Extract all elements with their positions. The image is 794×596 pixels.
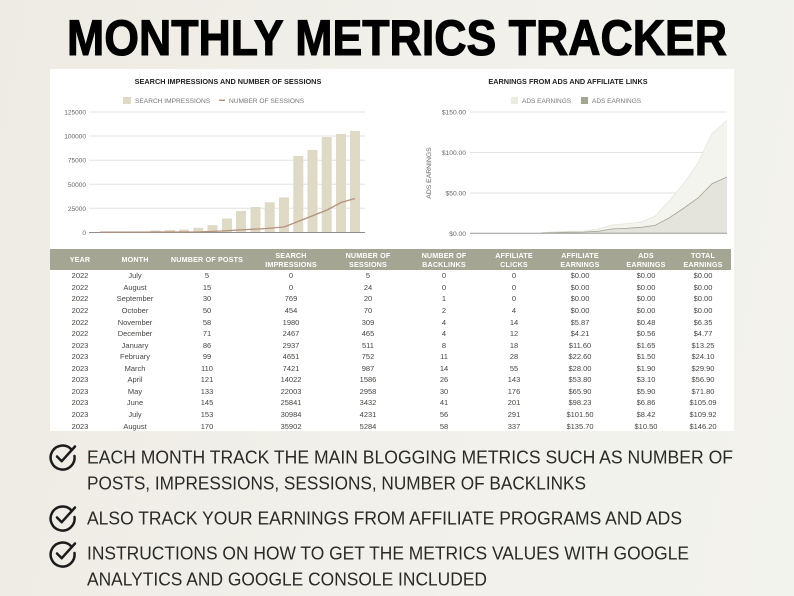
table rows: 4651 — [283, 352, 299, 361]
title: MONTHLY METRICS TRACKER — [67, 10, 727, 66]
table rows: 70 — [364, 306, 372, 315]
table rows: 170 — [201, 422, 213, 430]
y axis labels — [64, 110, 86, 237]
table rows: 8 — [442, 341, 446, 350]
table rows: 71 — [203, 329, 211, 338]
table rows: $135.70 — [566, 422, 594, 430]
table rows: 14 — [440, 364, 448, 373]
table rows: September — [117, 294, 153, 303]
table rows: October — [122, 306, 148, 315]
table header: CLICKS — [500, 260, 528, 268]
table rows: $0.00 — [637, 271, 655, 280]
table rows: February — [120, 352, 150, 361]
legend: ADS EARNINGS — [522, 98, 572, 105]
bullet text 1: POSTS, IMPRESSIONS, SESSIONS, NUMBER OF BACKLINKS — [87, 472, 586, 494]
table rows: $0.00 — [571, 283, 589, 292]
table header: SESSIONS — [349, 260, 387, 268]
table rows: April — [127, 375, 142, 384]
data table — [50, 249, 731, 430]
table rows: 7421 — [283, 364, 299, 373]
table rows: $0.48 — [637, 318, 655, 327]
icon: check 3 — [51, 543, 75, 567]
table rows: 4 — [442, 329, 446, 338]
table rows: 4 — [442, 318, 446, 327]
table rows: 35902 — [281, 422, 301, 430]
y axis labels: 25000 — [68, 206, 86, 213]
table rows: 201 — [508, 398, 520, 407]
y axis title: ADS EARNINGS — [426, 147, 433, 199]
table rows: $5.87 — [571, 318, 589, 327]
area: affiliate earnings — [541, 120, 727, 233]
baseline — [470, 232, 727, 234]
table rows: $56.90 — [692, 375, 714, 384]
table rows: 22003 — [281, 387, 301, 396]
table rows: 2022 — [72, 306, 88, 315]
table rows: 337 — [508, 422, 520, 430]
table rows: 11 — [440, 352, 448, 361]
table rows: $105.09 — [689, 398, 717, 407]
table rows: $0.00 — [637, 306, 655, 315]
table rows: $0.00 — [637, 283, 655, 292]
table rows: 0 — [442, 271, 446, 280]
table rows: 18 — [510, 341, 518, 350]
chart: earnings from ads and affiliate links — [426, 77, 727, 238]
icon: check 1 — [51, 446, 75, 470]
table rows: 121 — [201, 375, 213, 384]
table rows: 454 — [285, 306, 297, 315]
table rows: 56 — [440, 410, 448, 419]
table rows: $0.56 — [637, 329, 655, 338]
table rows: 2023 — [72, 352, 88, 361]
table rows: 143 — [508, 375, 520, 384]
table rows: $101.50 — [566, 410, 594, 419]
table rows: $6.86 — [637, 398, 655, 407]
bullet text 1 — [87, 446, 733, 494]
table rows: 2022 — [72, 329, 88, 338]
table rows: 4231 — [360, 410, 376, 419]
table header: EARNINGS — [560, 260, 600, 268]
table rows: 176 — [508, 387, 520, 396]
table rows: 511 — [362, 341, 374, 350]
y axis labels: $0.00 — [449, 231, 466, 238]
table rows: 2023 — [72, 410, 88, 419]
table rows: 0 — [512, 294, 516, 303]
table rows: $5.90 — [637, 387, 655, 396]
table rows: 2937 — [283, 341, 299, 350]
table rows: 2022 — [72, 271, 88, 280]
table rows: $109.92 — [689, 410, 717, 419]
table header: ADS — [638, 250, 654, 260]
table header: SEARCH — [275, 250, 307, 260]
chart title: EARNINGS FROM ADS AND AFFILIATE LINKS — [488, 77, 648, 86]
table rows: December — [118, 329, 152, 338]
y axis labels: $150.00 — [442, 110, 466, 116]
table rows: $11.60 — [569, 341, 591, 350]
table header: AFFILIATE — [561, 250, 599, 260]
table header: YEAR — [70, 255, 90, 264]
table rows: 2022 — [72, 294, 88, 303]
y axis labels: $100.00 — [442, 150, 466, 157]
table rows: $1.90 — [637, 364, 655, 373]
table header: IMPRESSIONS — [265, 260, 317, 268]
table rows: May — [128, 387, 142, 396]
table header: NUMBER OF — [346, 250, 390, 260]
table rows: 0 — [512, 271, 516, 280]
legend: ADS EARNINGS — [592, 98, 642, 105]
table rows: 55 — [510, 364, 518, 373]
table rows: 2 — [442, 306, 446, 315]
table rows: 0 — [289, 271, 293, 280]
table rows: $0.00 — [694, 306, 712, 315]
table rows: 5 — [205, 271, 209, 280]
table rows: 2022 — [72, 318, 88, 327]
table rows: July — [128, 271, 142, 280]
table rows: March — [125, 364, 145, 373]
y axis labels: 50000 — [68, 182, 86, 189]
table rows — [72, 271, 717, 430]
table rows: $10.50 — [635, 422, 657, 430]
table header: TOTAL — [691, 250, 715, 260]
baseline — [89, 232, 365, 234]
legend: SEARCH IMPRESSIONS — [135, 98, 211, 105]
table rows: $24.10 — [692, 352, 714, 361]
table rows: $22.60 — [569, 352, 591, 361]
y axis labels: $50.00 — [446, 190, 466, 198]
bullet text 3 — [87, 542, 689, 590]
table rows: 2023 — [72, 375, 88, 384]
table rows: August — [123, 283, 147, 292]
area: ads earnings — [541, 177, 727, 233]
table rows: 1980 — [283, 318, 299, 327]
legend — [123, 97, 305, 105]
table rows: 24 — [364, 283, 372, 292]
table rows: 987 — [362, 364, 374, 373]
table rows: $0.00 — [571, 306, 589, 315]
table rows: $1.65 — [637, 341, 655, 350]
table rows: 0 — [289, 283, 293, 292]
table rows: $29.90 — [692, 364, 714, 373]
table rows: June — [127, 398, 143, 407]
table rows: 30 — [203, 294, 211, 303]
table rows: 2023 — [72, 341, 88, 350]
table rows: $3.10 — [637, 375, 655, 384]
table rows: 58 — [440, 422, 448, 430]
table rows: 769 — [285, 294, 297, 303]
legend — [511, 97, 642, 105]
table rows: $28.00 — [569, 364, 591, 373]
table rows: 30984 — [281, 410, 301, 419]
table rows: 133 — [201, 387, 213, 396]
bullet text 3: INSTRUCTIONS ON HOW TO GET THE METRICS VALUES WITH GOOGLE — [87, 542, 689, 564]
table header: EARNINGS — [626, 260, 666, 268]
table rows: 2023 — [72, 422, 88, 430]
line: number of sessions — [100, 198, 355, 232]
y axis labels — [442, 110, 466, 238]
table rows: 153 — [201, 410, 213, 419]
table header: NUMBER OF POSTS — [171, 255, 243, 264]
table rows: 25841 — [281, 398, 301, 407]
table rows: $146.20 — [689, 422, 717, 430]
y axis labels: 0 — [82, 230, 86, 237]
table rows: 0 — [442, 283, 446, 292]
table rows: 1586 — [360, 375, 376, 384]
table rows: 41 — [440, 398, 448, 407]
table rows: 2958 — [360, 387, 376, 396]
table header — [50, 249, 731, 270]
legend: NUMBER OF SESSIONS — [229, 98, 305, 105]
table rows: 14 — [510, 318, 518, 327]
table rows: $13.25 — [692, 341, 714, 350]
gridlines — [470, 112, 727, 193]
table rows: 58 — [203, 318, 211, 327]
table rows: 2467 — [283, 329, 299, 338]
bullet text 2: ALSO TRACK YOUR EARNINGS FROM AFFILIATE PROGRAMS AND ADS — [87, 508, 682, 528]
table rows: 110 — [201, 364, 213, 373]
table rows: 28 — [510, 352, 518, 361]
table rows: $0.00 — [694, 283, 712, 292]
table rows: $98.23 — [569, 398, 591, 407]
table rows: $4.21 — [571, 329, 589, 338]
y axis labels: 100000 — [64, 134, 86, 140]
table rows: July — [128, 410, 142, 419]
panel: white dashboard sheet — [50, 69, 734, 431]
table rows: 309 — [362, 318, 374, 327]
table header: AFFILIATE — [495, 250, 533, 260]
table rows: 26 — [440, 375, 448, 384]
area outline: affiliate earnings — [541, 120, 727, 233]
table rows: 20 — [364, 294, 372, 303]
chart title: SEARCH IMPRESSIONS AND NUMBER OF SESSIONS — [135, 77, 321, 86]
table rows: 2023 — [72, 398, 88, 407]
table rows: 3432 — [360, 398, 376, 407]
gridlines — [89, 112, 365, 208]
table rows: 4 — [512, 306, 516, 315]
table rows: 0 — [512, 283, 516, 292]
table rows: 2022 — [72, 283, 88, 292]
table rows: 12 — [510, 329, 518, 338]
table rows: 50 — [203, 306, 211, 315]
area outline: ads earnings — [541, 177, 727, 233]
table rows: $0.00 — [571, 294, 589, 303]
bullet text 3: ANALYTICS AND GOOGLE CONSOLE INCLUDED — [87, 568, 487, 590]
table header: BACKLINKS — [422, 260, 466, 268]
table rows: 99 — [203, 352, 211, 361]
table rows: 30 — [440, 387, 448, 396]
bullet text 1: EACH MONTH TRACK THE MAIN BLOGGING METRICS SUCH AS NUMBER OF — [87, 446, 733, 468]
table rows: January — [122, 341, 148, 350]
table rows: $1.50 — [637, 352, 655, 361]
table rows: 1 — [442, 294, 446, 303]
table rows: $8.42 — [637, 410, 655, 419]
table rows: 2023 — [72, 364, 88, 373]
table rows: $71.80 — [692, 387, 714, 396]
table rows: $0.00 — [694, 294, 712, 303]
table rows: November — [118, 318, 152, 327]
table rows: 14022 — [281, 375, 301, 384]
table rows: $0.00 — [571, 271, 589, 280]
table rows: $4.77 — [694, 329, 712, 338]
chart: search impressions and sessions — [64, 77, 365, 237]
table rows: 86 — [203, 341, 211, 350]
table rows: 15 — [203, 283, 211, 292]
table rows: August — [123, 422, 147, 430]
table rows: $0.00 — [694, 271, 712, 280]
y axis labels: 75000 — [68, 158, 86, 165]
table rows: 2023 — [72, 387, 88, 396]
table rows: 465 — [362, 329, 374, 338]
table rows: 752 — [362, 352, 374, 361]
table rows: 145 — [201, 398, 213, 407]
table rows: $6.35 — [694, 318, 712, 327]
table header: MONTH — [121, 255, 149, 264]
table rows: $65.90 — [569, 387, 591, 396]
table rows: 5 — [366, 271, 370, 280]
table header: EARNINGS — [683, 260, 723, 268]
table rows: 5284 — [360, 422, 376, 430]
y axis labels: 125000 — [64, 110, 86, 116]
icon: check 2 — [51, 507, 75, 531]
table header: NUMBER OF — [422, 250, 466, 260]
table rows: $0.00 — [637, 294, 655, 303]
table rows: $53.80 — [569, 375, 591, 384]
table rows: 291 — [508, 410, 520, 419]
bars — [122, 131, 360, 232]
